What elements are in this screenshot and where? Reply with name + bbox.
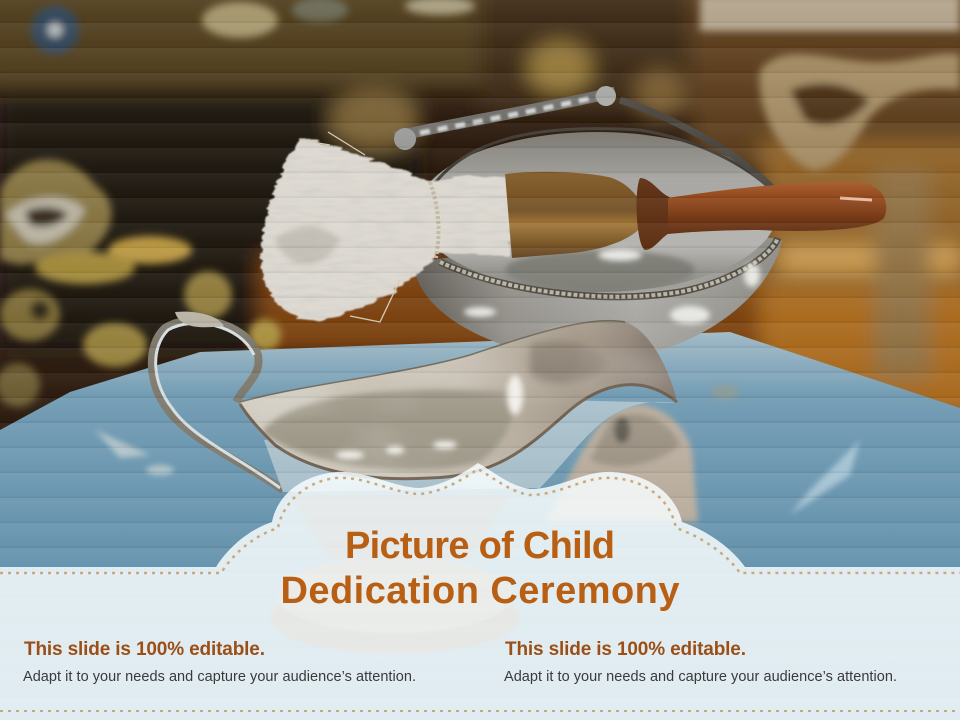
table wear marks xyxy=(95,384,860,515)
silver bowl with beaded rim and foot xyxy=(394,86,782,522)
shaving-style brush with wooden handle xyxy=(262,132,886,322)
blue table top xyxy=(0,332,960,720)
left text block: Adapt it to your needs and capture your audience’s attention. xyxy=(23,669,416,685)
title: Picture of Child xyxy=(345,525,615,567)
right text block: Adapt it to your needs and capture your audience’s attention. xyxy=(504,669,897,685)
title: Dedication Ceremony xyxy=(280,570,680,612)
left text block: This slide is 100% editable. xyxy=(24,639,265,660)
dotted scalloped border xyxy=(0,469,960,573)
left text block xyxy=(23,639,416,685)
right text block xyxy=(504,639,897,685)
boat pedestal base xyxy=(270,495,520,654)
right text block: This slide is 100% editable. xyxy=(505,639,746,660)
translucent scalloped panel xyxy=(0,463,960,720)
silver gravy boat xyxy=(152,312,677,492)
dotted bottom border xyxy=(0,710,960,712)
